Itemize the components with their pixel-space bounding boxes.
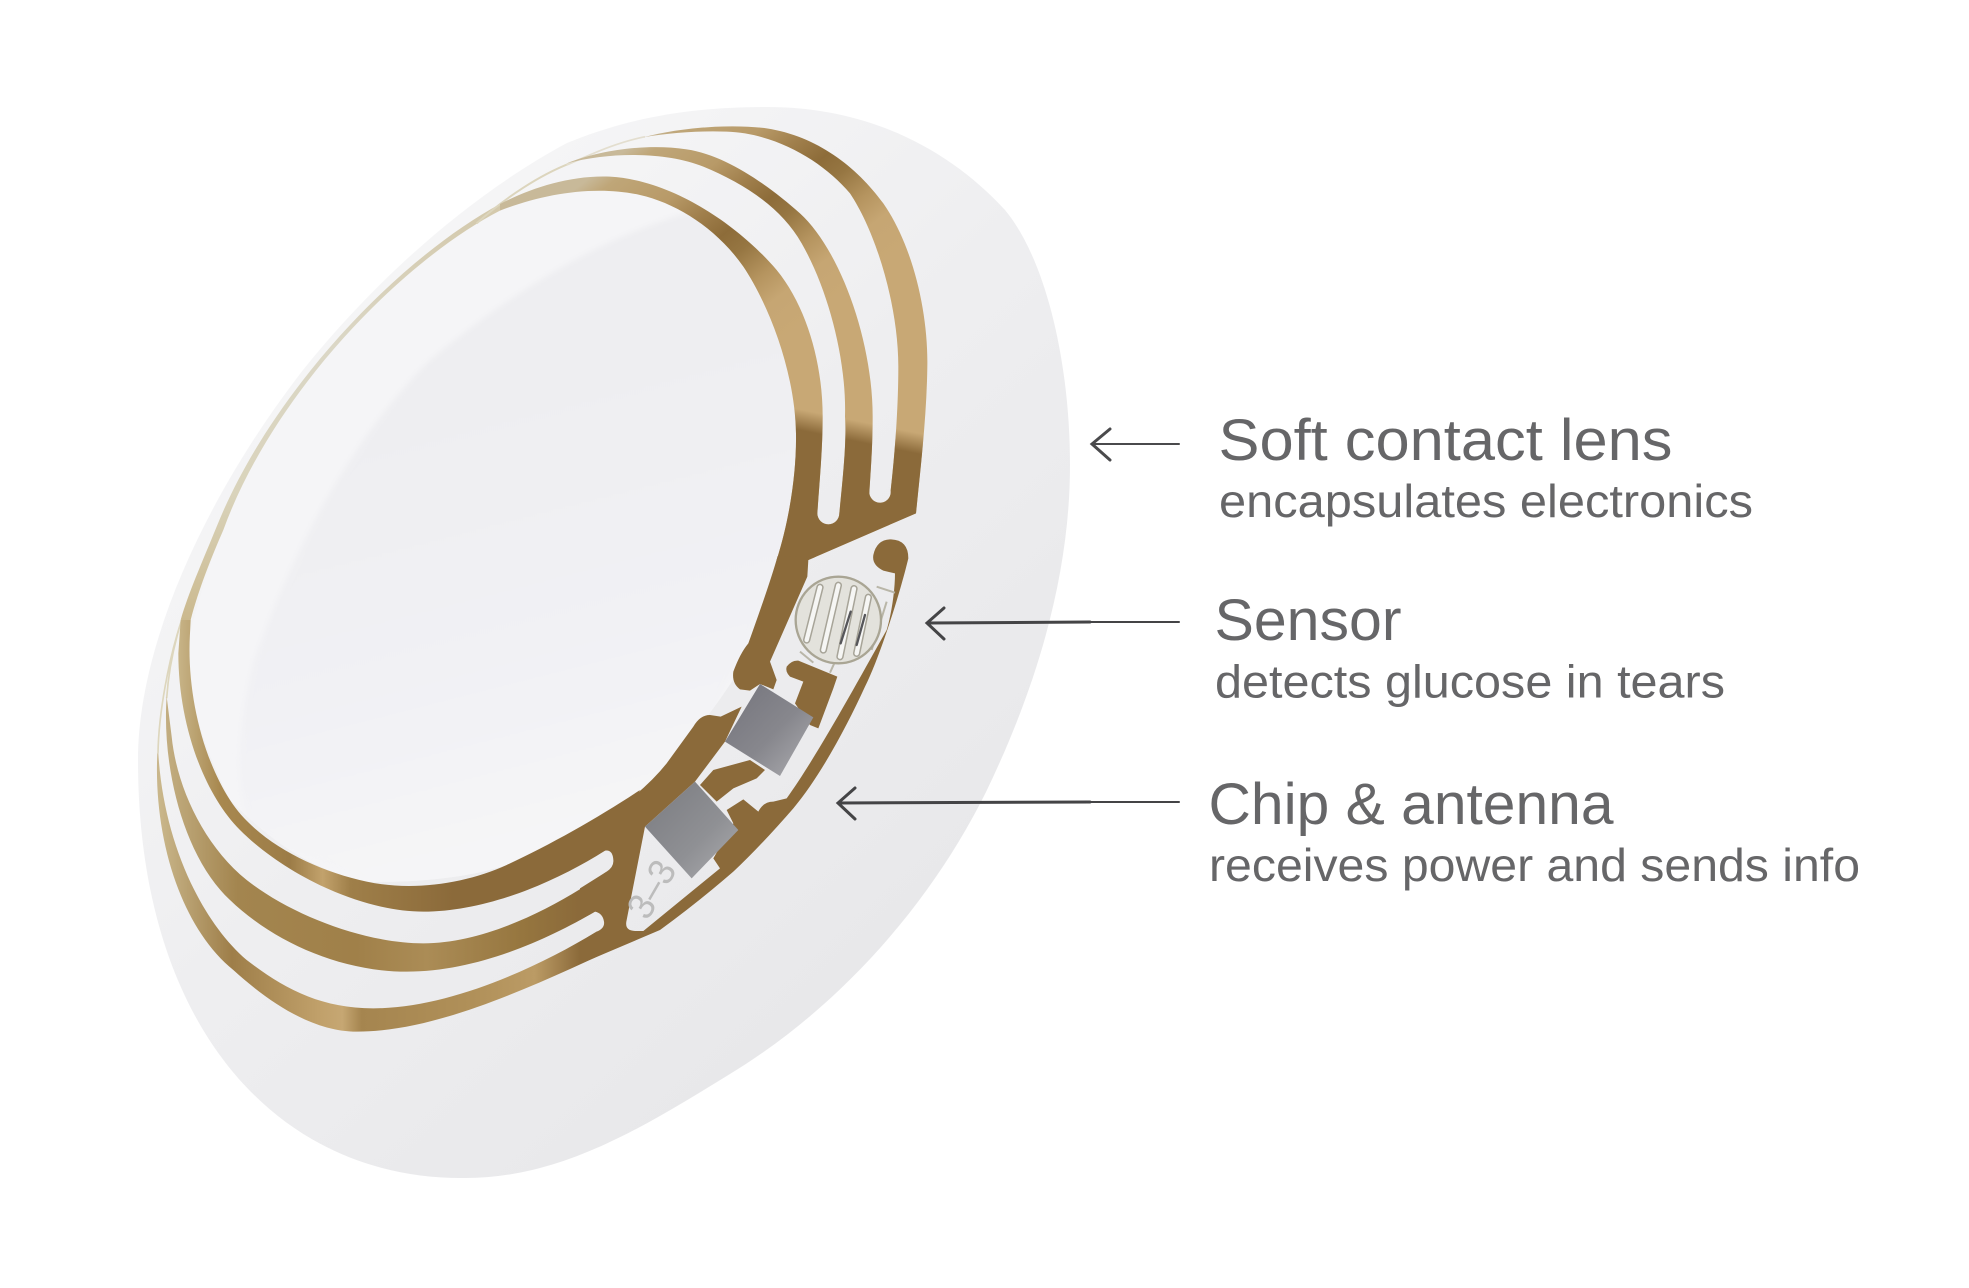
upper gold junction block [733, 556, 816, 691]
lower gold junction and antenna [580, 539, 908, 964]
outer ring bottom [157, 753, 640, 1032]
sensor leads [800, 587, 895, 673]
sensor electrodes [807, 585, 868, 657]
heading: Soft contact lens [1218, 408, 1672, 473]
label: soft contact lens [1218, 408, 1753, 527]
description: detects glucose in tears [1215, 656, 1725, 708]
inner lens shading [240, 205, 820, 900]
sensor disc [796, 577, 881, 663]
description: encapsulates electronics [1219, 475, 1753, 527]
callout arrow: sensor [927, 608, 1179, 639]
merged thin trace [181, 204, 500, 620]
callout arrow: chip and antenna [838, 788, 1179, 819]
inner lens face [189, 191, 796, 882]
three gold rings, lower part [157, 620, 640, 1032]
part number marking: 3–3 [618, 853, 684, 926]
soft lens body [138, 107, 1070, 1178]
sensor mount trace [786, 661, 837, 728]
label: chip and antenna [1208, 772, 1860, 891]
three gold rings, upper part [500, 126, 927, 560]
thin middle trace [477, 163, 570, 223]
heading: Chip & antenna [1208, 772, 1614, 837]
pale left tails [158, 620, 182, 753]
thin outer trace [567, 137, 645, 165]
chip link trace [700, 760, 765, 802]
glucose sensor [796, 577, 895, 673]
thin upper-left traces [181, 137, 645, 620]
electronics [580, 539, 908, 964]
lower chip [645, 782, 738, 878]
label: sensor [1214, 588, 1725, 708]
contact lens illustration [138, 107, 1070, 1178]
callout arrow: soft contact lens [1092, 429, 1179, 460]
description: receives power and sends info [1209, 839, 1860, 891]
inner ring bottom [178, 620, 640, 912]
upper chip [725, 684, 813, 776]
middle ring bottom [166, 697, 607, 972]
heading: Sensor [1214, 588, 1402, 653]
